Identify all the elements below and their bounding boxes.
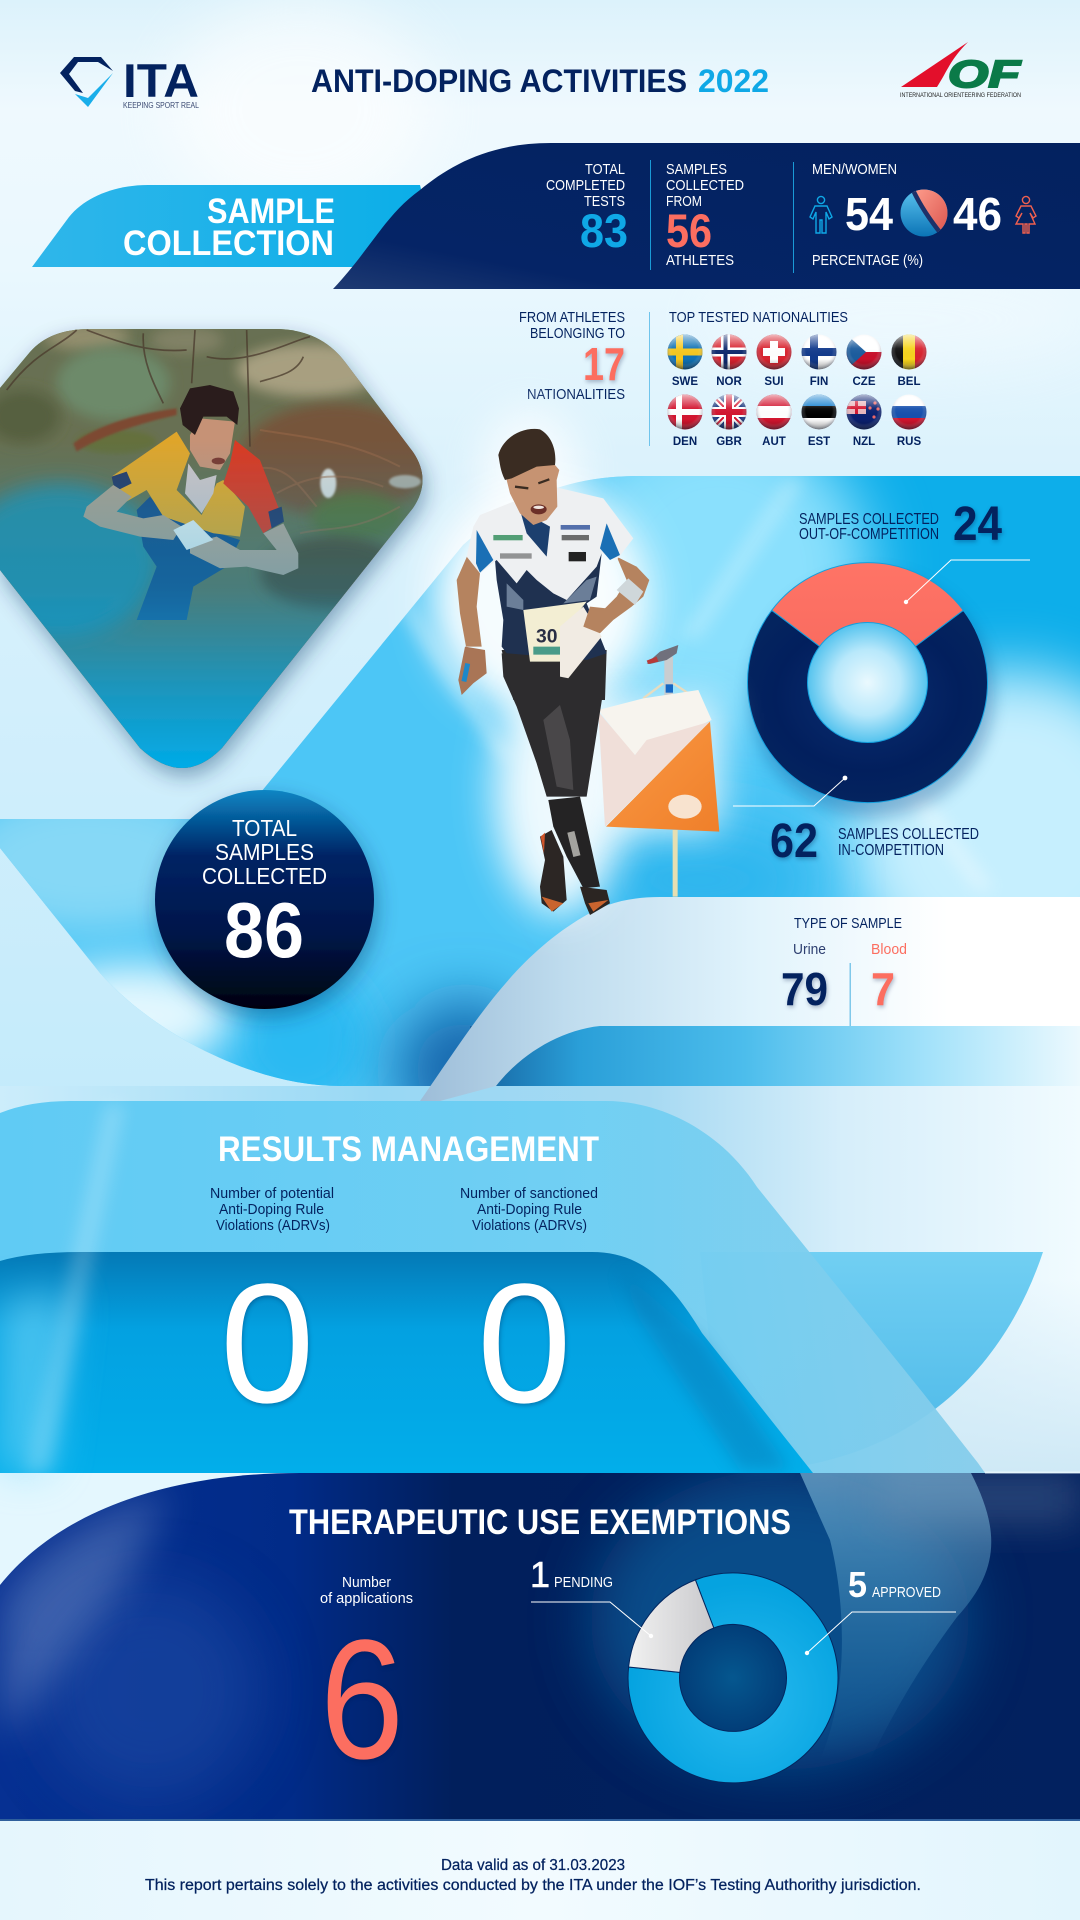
panel: sample collection ribbon: SAMPLE: [207, 192, 335, 231]
label: in-competition: IN-COMPETITION: [838, 842, 944, 859]
flag: FIN: FIN: [810, 376, 828, 388]
label: pending: 1: [530, 1554, 550, 1595]
segment: pending 1: [629, 1580, 714, 1672]
nationalities count: 17: [583, 338, 625, 390]
nationalities count: [519, 309, 625, 403]
panel: sample collection ribbon: [32, 185, 440, 267]
runner legs: [502, 653, 610, 915]
flag: GBR: [711, 394, 747, 448]
total completed tests: TESTS: [584, 193, 625, 210]
label: in-competition: [770, 815, 979, 868]
title: ANTI-DOPING ACTIVITIES: [311, 63, 687, 99]
flag: SUI: [756, 334, 792, 388]
metric: sanctioned ADRVs: 0: [477, 1249, 572, 1439]
samples from athletes: COLLECTED: [666, 177, 744, 194]
top tested nationalities: [667, 309, 927, 448]
icon: gender ball: [900, 190, 948, 236]
segment: out-of-competition 24: [772, 563, 963, 646]
total completed tests: TOTAL: [585, 161, 625, 178]
label: out-of-competition: SAMPLES COLLECTED: [799, 511, 939, 528]
panel: results management dark lower: [0, 1105, 813, 1473]
total completed tests: COMPLETED: [546, 177, 625, 194]
samples from athletes: ATHLETES: [666, 252, 734, 269]
label: approved: APPROVED: [872, 1584, 941, 1601]
type of sample: Blood: [871, 941, 907, 958]
blue swoosh band: [0, 476, 1080, 1086]
flag: NZL: [846, 394, 882, 448]
ITA logo: ITA: [123, 54, 199, 107]
footer note: Data valid as of 31.03.2023: [441, 1857, 625, 1874]
control flag: [598, 645, 719, 897]
panel: photo of athlete in forest: [0, 320, 433, 787]
flag: DEN: DEN: [673, 436, 697, 448]
results management: right triangle backdrop: [700, 1252, 1043, 1473]
label: in-competition: 62: [770, 815, 818, 868]
flag: NOR: [711, 334, 747, 388]
label: out-of-competition: OUT-OF-COMPETITION: [799, 526, 939, 543]
flag: BEL: [891, 334, 927, 388]
label: out-of-competition: 24: [953, 498, 1002, 551]
IOF logo: [900, 42, 1022, 99]
icon: man: [810, 196, 832, 233]
men women split: MEN/WOMEN: [812, 161, 897, 178]
type of sample: Urine: [793, 941, 826, 958]
panel: navy TUE section: [0, 1470, 1080, 1821]
label: approved: 5: [848, 1564, 867, 1605]
metric: sanctioned ADRVs: Number of sanctioned: [460, 1186, 598, 1202]
title: 2022: [698, 63, 769, 99]
samples from athletes: 56: [666, 204, 712, 257]
section: footer background: [0, 1821, 1080, 1920]
flag: NOR: NOR: [716, 376, 742, 388]
flag: AUT: [756, 394, 792, 448]
nationalities count: NATIONALITIES: [527, 386, 625, 403]
type of sample: 79: [781, 963, 828, 1015]
footer note: [145, 1857, 921, 1894]
total samples collected circle: 86: [224, 886, 304, 974]
heading: results management: RESULTS MANAGEMENT: [218, 1130, 599, 1169]
metric: number of applications: 6: [320, 1605, 404, 1795]
label: in-competition: SAMPLES COLLECTED: [838, 826, 979, 843]
total completed tests: [546, 161, 628, 257]
flag: RUS: RUS: [897, 436, 921, 448]
samples from athletes: SAMPLES: [666, 161, 727, 178]
flag: SUI: SUI: [764, 376, 784, 388]
footer note: This report pertains solely to the activities conducted by the ITA under the IOF’s Testing Authorithy jurisdiction.: [145, 1877, 921, 1894]
metric: potential ADRVs: [210, 1186, 334, 1439]
panel: sample collection ribbon: COLLECTION: [123, 224, 334, 263]
IOF logo: OF: [948, 54, 1022, 96]
runner upper body: 30: [536, 626, 557, 647]
metric: sanctioned ADRVs: Anti-Doping Rule: [477, 1202, 582, 1218]
metric: sanctioned ADRVs: Violations (ADRVs): [472, 1218, 587, 1234]
flag: CZE: CZE: [852, 376, 876, 388]
runner upper body: [457, 429, 649, 700]
metric: potential ADRVs: Violations (ADRVs): [216, 1218, 330, 1234]
flag: FIN: [801, 334, 837, 388]
nationalities count: FROM ATHLETES: [519, 309, 625, 326]
metric: potential ADRVs: Number of potential: [210, 1186, 334, 1202]
type of sample: [781, 915, 907, 1026]
men women split: PERCENTAGE (%): [812, 252, 923, 269]
label: approved: [848, 1564, 941, 1605]
flag: SWE: [667, 334, 703, 388]
flag: EST: EST: [808, 436, 830, 448]
men women split: 54: [845, 188, 893, 240]
samples from athletes: FROM: [666, 193, 702, 210]
label: pending: PENDING: [554, 1574, 613, 1591]
men women split: 46: [953, 188, 1002, 240]
total samples collected circle: COLLECTED: [202, 863, 327, 889]
total samples collected circle: SAMPLES: [215, 839, 314, 865]
photo: runner cutout and control flag: [430, 410, 720, 915]
flag: DEN: [667, 394, 703, 448]
total completed tests: 83: [580, 204, 628, 257]
donut chart: TUE status: [531, 1573, 956, 1783]
nationalities count: BELONGING TO: [530, 325, 625, 342]
flag: EST: [801, 394, 837, 448]
men women split: [810, 161, 1036, 269]
flag: BEL: BEL: [898, 376, 920, 388]
flag: NZL: NZL: [853, 436, 875, 448]
heading: therapeutic use exemptions: THERAPEUTIC USE EXEMPTIONS: [289, 1503, 791, 1542]
ITA logo: KEEPING SPORT REAL: [123, 100, 199, 110]
donut chart: in and out of competition: [733, 560, 1030, 817]
panel: navy test summary: [333, 143, 1080, 289]
panel: results management upper: [0, 1101, 985, 1473]
type of sample: 7: [871, 963, 895, 1015]
flag: CZE: [846, 334, 882, 388]
metric: potential ADRVs: 0: [220, 1249, 315, 1439]
flag: AUT: AUT: [762, 436, 786, 448]
metric: potential ADRVs: Anti-Doping Rule: [219, 1202, 324, 1218]
panel: sample type backdrop: [420, 897, 1080, 1101]
ITA logo: [60, 54, 199, 110]
label: out-of-competition: [799, 498, 1002, 551]
segment: in-competition 62: [748, 610, 988, 803]
flag: RUS: [891, 394, 927, 448]
segment: approved 5: [628, 1573, 838, 1783]
total samples collected circle: [155, 790, 374, 1009]
flag: SWE: SWE: [672, 376, 698, 388]
flag: GBR: GBR: [716, 436, 742, 448]
type of sample: TYPE OF SAMPLE: [794, 915, 902, 932]
top tested nationalities: TOP TESTED NATIONALITIES: [669, 309, 848, 326]
metric: number of applications: of applications: [320, 1591, 413, 1607]
label: pending: [530, 1554, 613, 1595]
samples from athletes: [666, 161, 744, 269]
icon: woman: [1016, 196, 1036, 233]
total samples collected circle: TOTAL: [232, 815, 297, 841]
IOF logo: INTERNATIONAL ORIENTEERING FEDERATION: [900, 92, 1021, 99]
metric: number of applications: Number: [342, 1575, 391, 1591]
metric: sanctioned ADRVs: [460, 1186, 598, 1439]
